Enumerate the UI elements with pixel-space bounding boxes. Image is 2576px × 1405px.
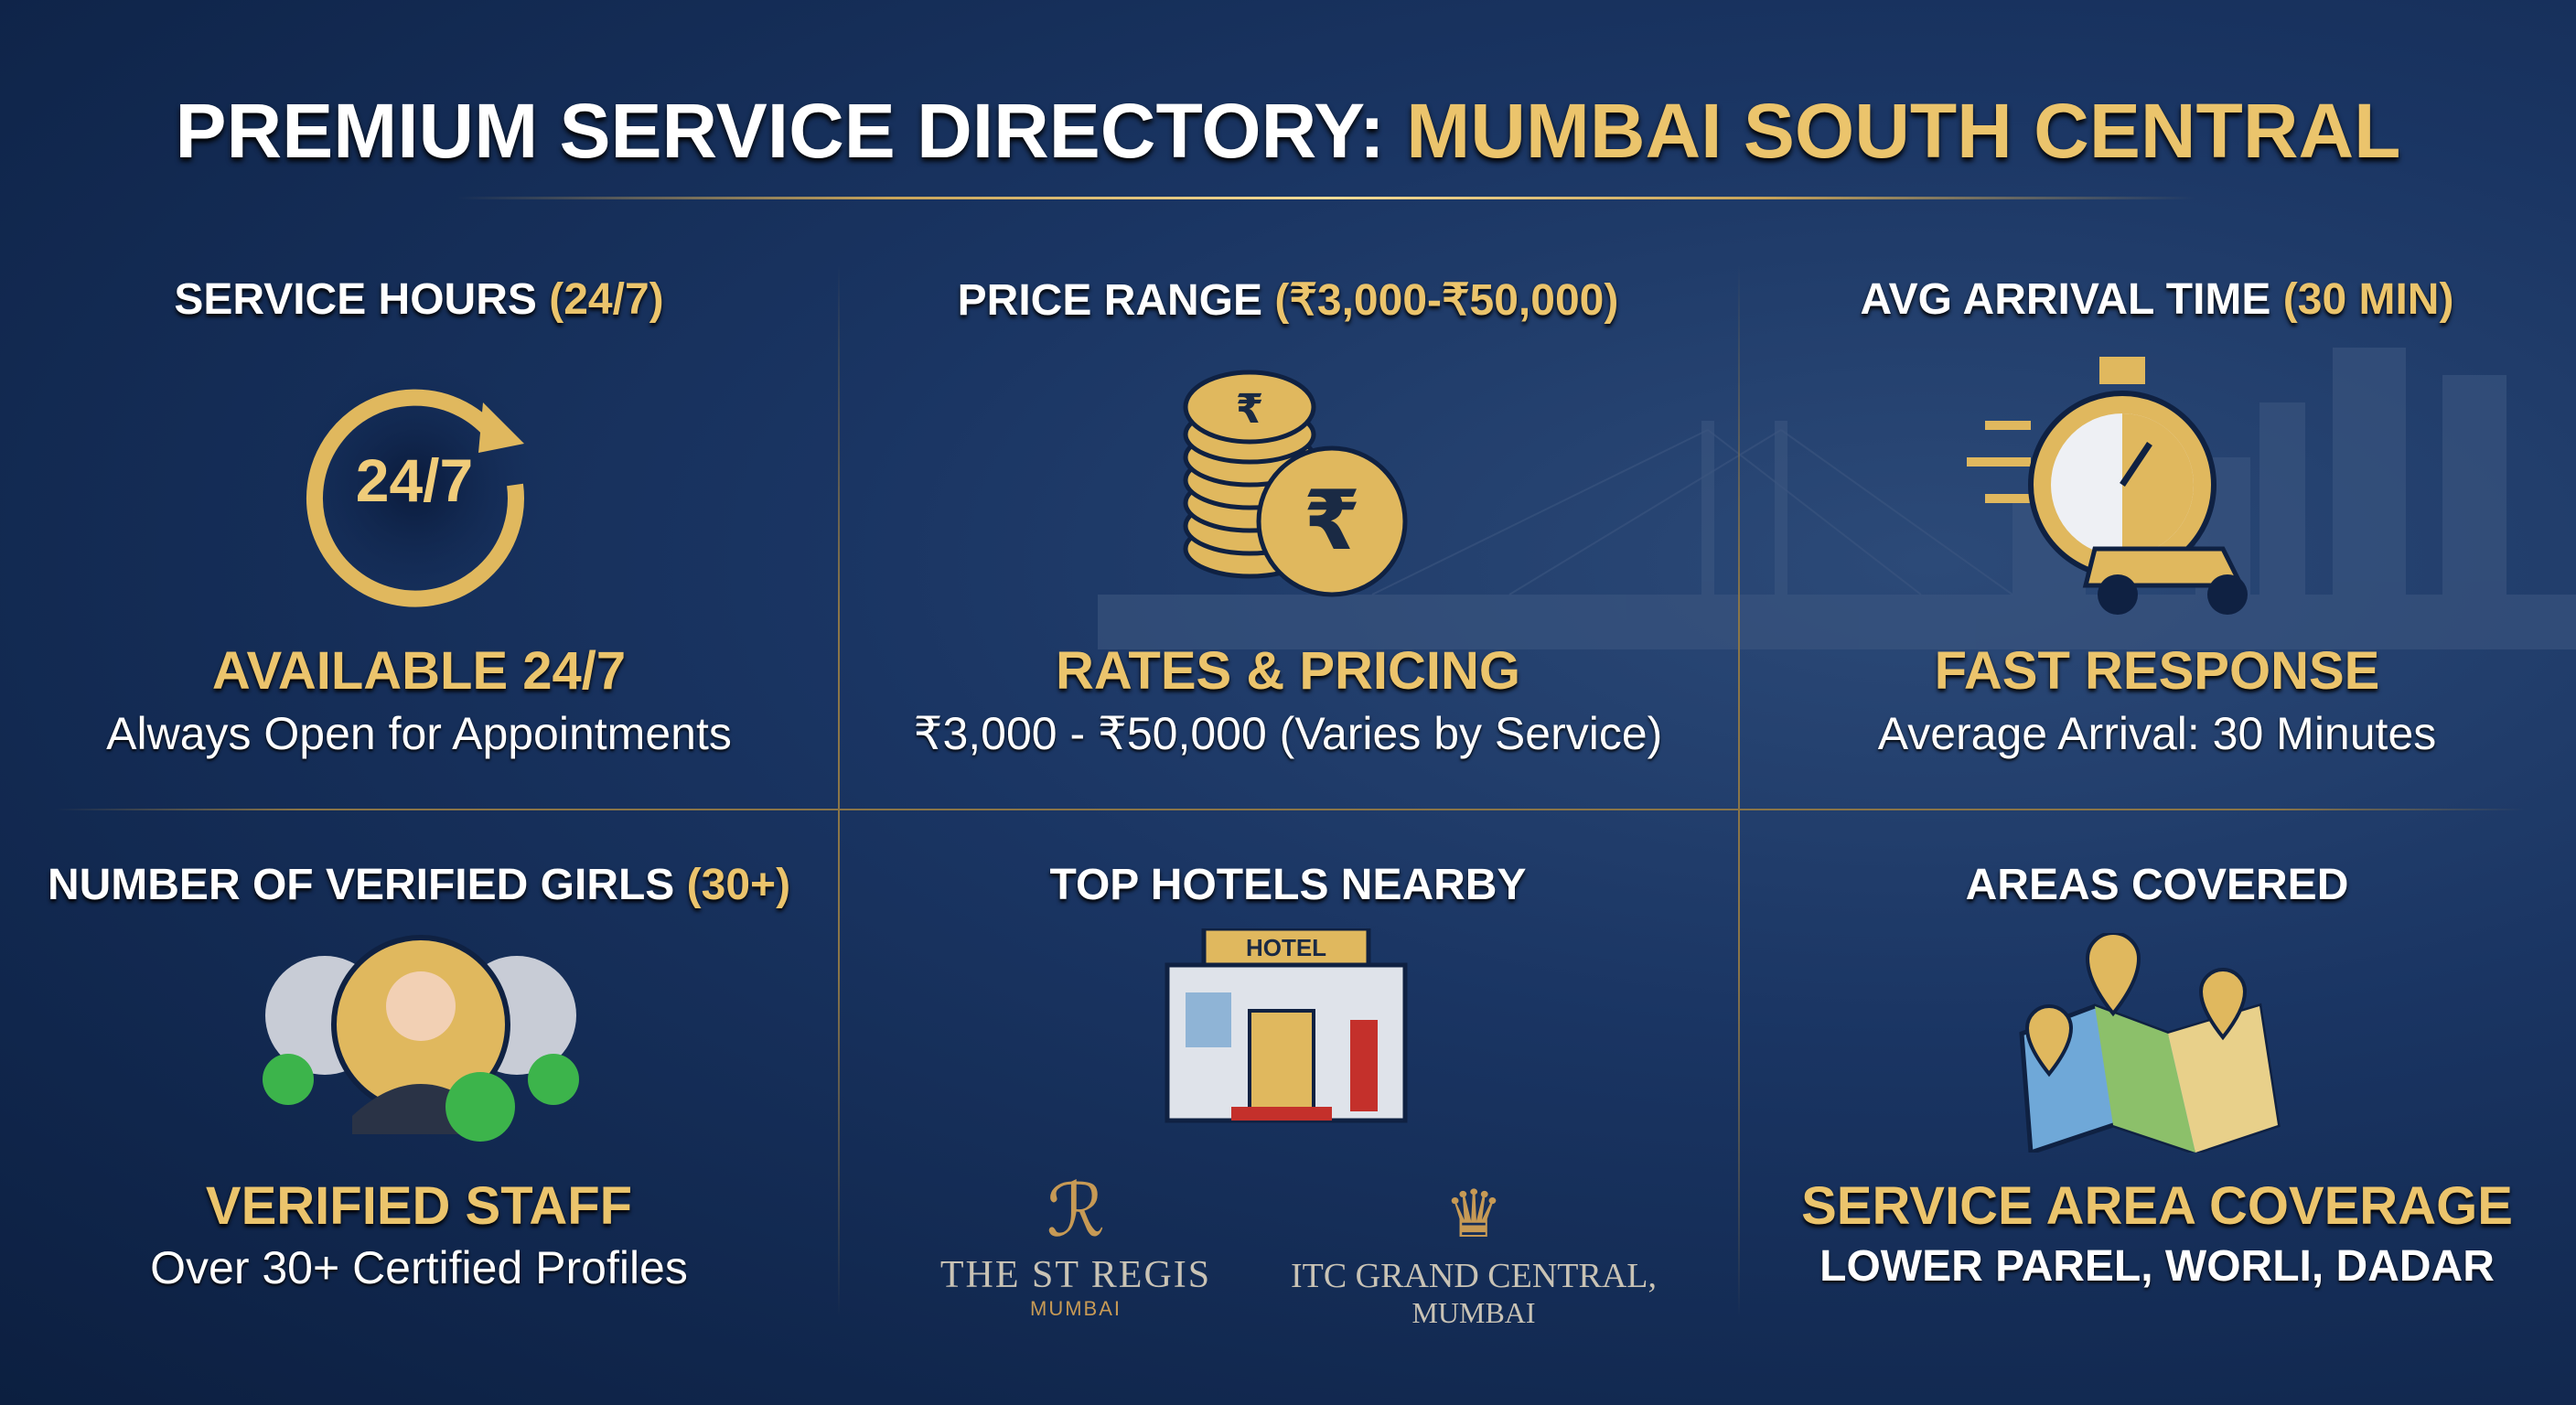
icon: 24/7 clock: 24/7 bbox=[356, 446, 473, 514]
icon: map bbox=[2020, 933, 2281, 1153]
label: FAST RESPONSE bbox=[1935, 641, 2379, 701]
heading: AREAS COVERED bbox=[1966, 861, 2348, 909]
icon: coins: ₹ bbox=[1304, 473, 1360, 569]
subtext: Always Open for Appointments bbox=[106, 708, 732, 759]
panel: top hotels: MUMBAI bbox=[1030, 1297, 1122, 1320]
icon: coins bbox=[1184, 370, 1407, 596]
subtext: ₹3,000 - ₹50,000 (Varies by Service) bbox=[914, 708, 1662, 759]
panel: areas covered bbox=[1801, 861, 2514, 1292]
icon: hotel: HOTEL bbox=[1246, 934, 1326, 961]
icon: hotel bbox=[1165, 928, 1407, 1123]
icon: coins: ₹ bbox=[1236, 386, 1263, 433]
panel: top hotels: MUMBAI bbox=[1411, 1296, 1536, 1329]
icon: verified people bbox=[263, 935, 579, 1142]
panel: verified girls bbox=[48, 861, 790, 1293]
subtext: Average Arrival: 30 Minutes bbox=[1878, 708, 2436, 759]
heading: TOP HOTELS NEARBY bbox=[1050, 861, 1526, 909]
icon: stopwatch scooter bbox=[1967, 357, 2248, 615]
panel: arrival time bbox=[1859, 275, 2454, 763]
heading: SERVICE HOURS (24/7) bbox=[174, 275, 664, 324]
title: PREMIUM SERVICE DIRECTORY: MUMBAI SOUTH CENTRAL bbox=[176, 88, 2400, 174]
skyline background bbox=[1098, 348, 2576, 649]
heading: NUMBER OF VERIFIED GIRLS (30+) bbox=[48, 861, 790, 909]
logo: St Regis: ℛ bbox=[1046, 1172, 1105, 1252]
subtext: Over 30+ Certified Profiles bbox=[150, 1242, 688, 1293]
icon: 24/7 clock bbox=[306, 390, 524, 607]
label: RATES & PRICING bbox=[1056, 641, 1520, 701]
label: SERVICE AREA COVERAGE bbox=[1801, 1176, 2513, 1236]
logo: ITC Grand Central: ♛ bbox=[1444, 1178, 1503, 1251]
label: AVAILABLE 24/7 bbox=[212, 641, 626, 701]
grid lines bbox=[838, 265, 840, 1317]
heading: AVG ARRIVAL TIME (30 MIN) bbox=[1861, 275, 2453, 324]
panel: top hotels bbox=[940, 861, 1657, 1329]
heading: PRICE RANGE (₹3,000-₹50,000) bbox=[958, 276, 1618, 325]
logo: St Regis bbox=[940, 1172, 1211, 1320]
panel: service hours bbox=[105, 275, 732, 763]
logo: ITC Grand Central: ITC GRAND CENTRAL, bbox=[1291, 1257, 1657, 1295]
logo: St Regis: THE ST REGIS bbox=[940, 1254, 1211, 1296]
panel: price range bbox=[914, 276, 1662, 763]
logo: ITC Grand Central bbox=[1291, 1178, 1657, 1329]
subtext: LOWER PAREL, WORLI, DADAR bbox=[1819, 1242, 2495, 1291]
label: VERIFIED STAFF bbox=[206, 1176, 632, 1236]
